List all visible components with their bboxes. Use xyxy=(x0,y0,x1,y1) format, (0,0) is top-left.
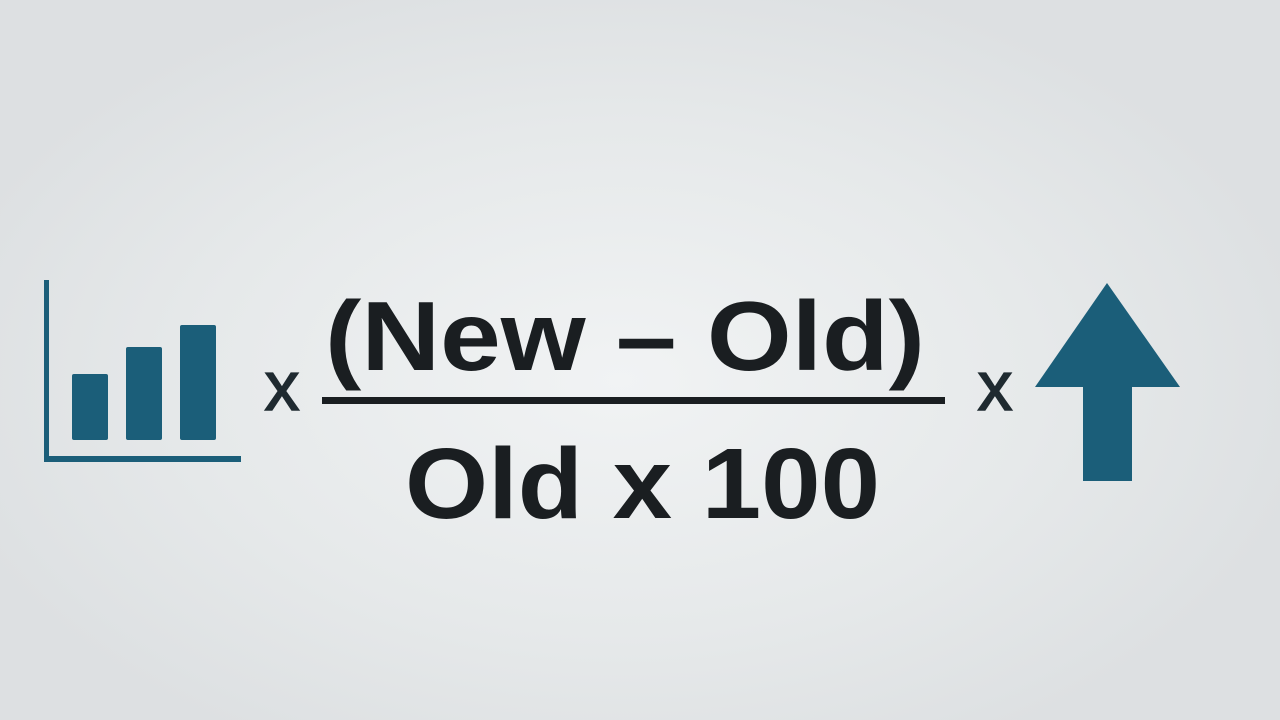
fraction line xyxy=(322,397,945,404)
denominator: Old x 100 xyxy=(405,428,880,540)
numerator: (New – Old) xyxy=(325,281,925,391)
multiply sign left: x xyxy=(264,347,300,425)
icon: up arrow xyxy=(1035,283,1180,481)
multiply sign right: x xyxy=(978,347,1012,425)
icon: bar chart xyxy=(44,280,241,462)
